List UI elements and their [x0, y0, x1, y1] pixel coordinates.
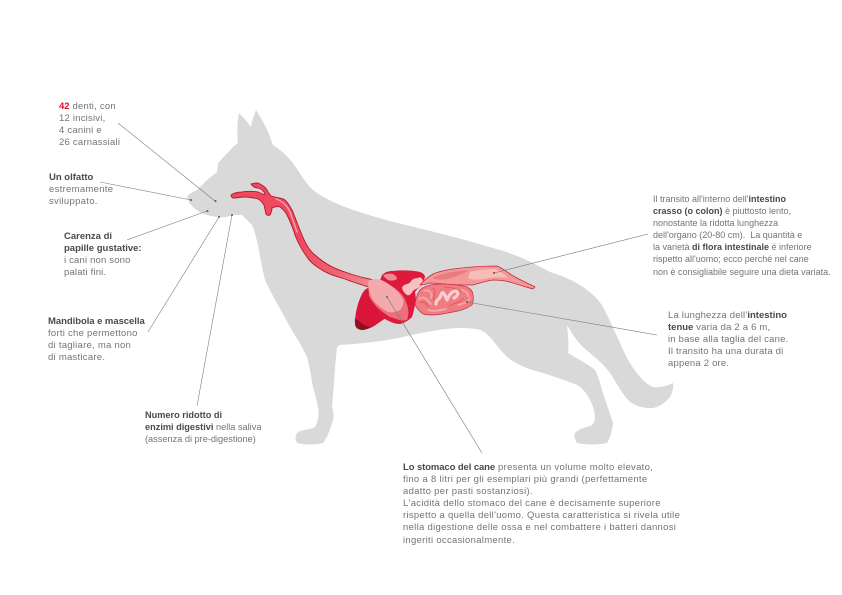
small intestine: [415, 284, 473, 315]
text: denti: 12 incisivi,: [59, 113, 105, 124]
duodenum: [402, 277, 423, 295]
large intestine: [420, 266, 535, 289]
colon shading: [432, 270, 470, 280]
text: intestino tenue: Il transito ha una durata di: [668, 346, 783, 357]
stomach rim: [368, 284, 408, 321]
text: olfatto: estremamente: [49, 184, 113, 195]
text: denti: 4 canini e: [59, 125, 102, 136]
text: mandibola: Mandibola e mascella: [48, 316, 145, 327]
text: mandibola: di masticare.: [48, 352, 105, 363]
text: olfatto: sviluppato.: [49, 196, 98, 207]
leader: papille: [127, 211, 207, 240]
text: stomaco: [403, 462, 680, 546]
text: intestino crasso: rispetto all'uomo; ecco perché nel cane: [653, 254, 809, 264]
text: intestino tenue: in base alla taglia del cane.: [668, 334, 788, 345]
leader lines: [100, 123, 233, 406]
text: denti: [59, 101, 120, 148]
text: papille gustative: i cani non sono: [64, 255, 131, 266]
liver: [355, 287, 390, 330]
text: papille gustative: papille gustative:: [64, 243, 142, 254]
text: intestino crasso: nonostante la ridotta lunghezza: [653, 218, 778, 228]
text: papille gustative: palati fini.: [64, 267, 106, 278]
leader: stomaco: [386, 296, 482, 453]
text: enzimi digestivi: [145, 410, 262, 444]
fold lines: [420, 287, 464, 307]
intestinal folds: [419, 290, 470, 311]
dog silhouette: [187, 110, 673, 444]
liver main lobe: [355, 287, 390, 330]
leader: denti: [118, 123, 215, 201]
dots on muzzle: [190, 199, 233, 218]
esophagus highlight: [276, 199, 297, 232]
text: mandibola: di tagliare, ma non: [48, 340, 131, 351]
text: intestino tenue: La lunghezza dell'intestino: [668, 310, 787, 321]
text: enzimi digestivi: (assenza di pre-digestione): [145, 434, 256, 444]
liver shadow: [355, 318, 377, 330]
leader: mandibola: [148, 217, 219, 332]
text: denti: 42 denti, con: [59, 101, 116, 112]
text: intestino crasso: Il transito all'interno dell'intestino: [653, 194, 786, 204]
esophagus and pharynx: [231, 183, 374, 288]
text: intestino crasso: la varietà di flora intestinale è inferiore: [653, 242, 812, 252]
leader: intestino tenue: [466, 301, 657, 335]
text: stomaco: nella digestione delle ossa e nel combattere i batteri dannosi: [403, 522, 676, 533]
upper pale lobe: [383, 274, 397, 281]
text: enzimi digestivi: enzimi digestivi nella saliva: [145, 422, 261, 432]
pale inner coil: [436, 291, 458, 304]
text: mandibola: [48, 316, 145, 363]
leader: intestino crasso: [493, 234, 648, 274]
text: olfatto: [49, 172, 113, 207]
text: intestino tenue: [668, 310, 788, 369]
text: stomaco: ingeriti occasionalmente.: [403, 535, 515, 546]
text: olfatto: Un olfatto: [49, 172, 93, 183]
small intestine body: [415, 284, 473, 315]
colon body: [420, 266, 535, 289]
text: mandibola: forti che permettono: [48, 328, 138, 339]
stomach body: [368, 279, 403, 312]
text: enzimi digestivi: Numero ridotto di: [145, 410, 222, 420]
text: intestino tenue: tenue varia da 2 a 6 m,: [668, 322, 770, 333]
leader: enzimi: [197, 215, 232, 406]
text: stomaco: Lo stomaco del cane presenta un volume molto elevato,: [403, 462, 653, 473]
text: stomaco: L'acidità dello stomaco del cane è decisamente superiore: [403, 498, 661, 509]
text: intestino crasso: dell'organo (20-80 cm). La quantità e: [653, 230, 802, 240]
text: intestino crasso: non è consigliabile seguire una dieta variata.: [653, 267, 831, 277]
text: stomaco: adatto per pasti sostanziosi).: [403, 486, 533, 497]
esophagus tube with branches: [231, 183, 374, 288]
stomach: [368, 270, 425, 324]
text: stomaco: rispetto a quella dell'uomo. Questa caratteristica si rivela utile: [403, 510, 680, 521]
text: intestino crasso: [653, 194, 831, 277]
text: papille gustative: [64, 231, 142, 278]
text: intestino crasso: crasso (o colon) è piuttosto lento,: [653, 206, 791, 216]
leader: olfatto: [100, 182, 191, 200]
text: stomaco: fino a 8 litri per gli esemplari più grandi (perfettamente: [403, 474, 647, 485]
colon highlight: [468, 269, 508, 280]
text: intestino tenue: appena 2 ore.: [668, 358, 729, 369]
text: papille gustative: Carenza di: [64, 231, 112, 242]
red mass behind the stomach: [373, 270, 425, 324]
text: denti: 26 carnassiali: [59, 137, 120, 148]
